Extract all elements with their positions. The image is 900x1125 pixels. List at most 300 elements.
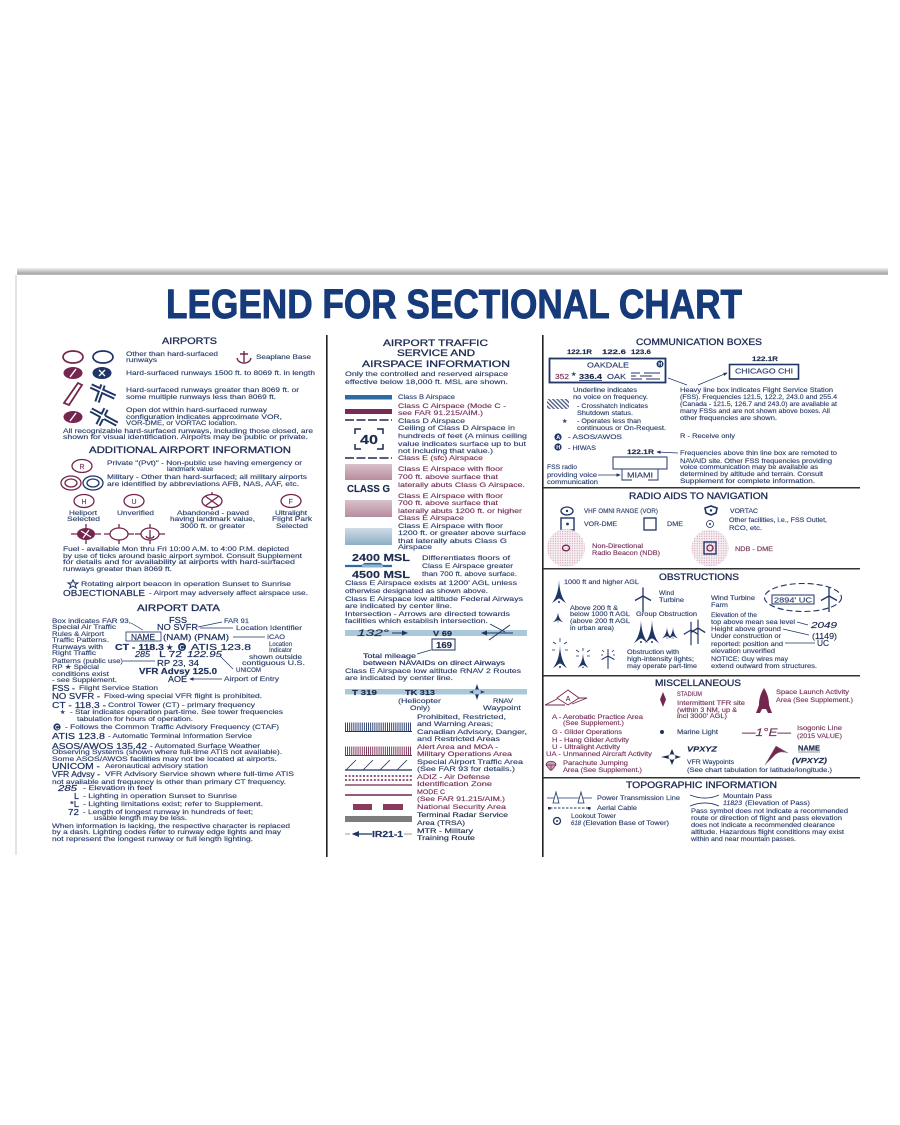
text: additional airport descriptions: by use of ticks around basic airport symbol. Consult Supplement xyxy=(63,553,302,560)
text: miscellaneous activity labels: G - Glider Operations xyxy=(552,729,623,736)
text: obstruction labels: Farm xyxy=(711,602,729,609)
text: airport data definitions: CT - 118.3 - xyxy=(52,701,107,710)
text: obstruction labels: Height above ground xyxy=(711,626,781,633)
text: mountain pass notes: Pass symbol does not indicate a recommended xyxy=(691,808,848,815)
icon: mountain pass xyxy=(690,795,719,806)
text: obstruction labels: in urban area) xyxy=(570,625,614,632)
text: airport data definitions: not represent the longest runway or full length lighting. xyxy=(52,836,253,843)
text: additional airport descriptions: Ultralight xyxy=(275,510,307,517)
icon: beacon star xyxy=(68,580,78,588)
text: additional airport descriptions: Private "(Pvt)" - Non-public use having emergency or xyxy=(107,460,303,467)
diagram: Chicago box xyxy=(668,356,798,385)
text: obstruction labels: elevation unverified xyxy=(711,648,775,655)
text: special use airspace descriptions: and Restricted Areas xyxy=(417,736,501,743)
key: communication symbols: Shutdown status. xyxy=(577,410,633,417)
text: airport data definitions: - Star indicates operation part-time. See tower frequencies xyxy=(70,709,284,716)
text: navigation aid labels: VOR-DME xyxy=(584,521,618,528)
text: additional airport descriptions: are identified by abbreviations AFB, NAS, AAF, etc. xyxy=(107,481,299,488)
text: airspace class descriptions: Class E Airspace with floor xyxy=(398,466,504,473)
heading: airspace information: AIRSPACE INFORMATION xyxy=(362,359,510,369)
airspace symbols: CLASS G xyxy=(347,484,390,495)
text: airports descriptions: VOR-DME, or VORTAC location. xyxy=(126,420,237,427)
diagram: airport data sample block: 285 xyxy=(134,650,151,659)
text: airspace class descriptions: otherwise designated as shown above. xyxy=(345,588,488,595)
text: additional airport descriptions: Flight Park xyxy=(272,516,313,523)
text: special use airspace descriptions: (See FAR 93 for details.) xyxy=(417,766,515,773)
text: special use airspace descriptions: and Warning Areas; xyxy=(417,721,493,728)
text: mountain pass notes: within and near mountain passes. xyxy=(690,836,796,843)
icon: wind turbine farm: 2894' UC xyxy=(774,596,813,604)
diagram: RNAV route T 319: Only) xyxy=(410,705,430,712)
text: navigation aid labels: Other facilities, i.e., FSS Outlet, xyxy=(729,517,827,524)
panel: airport data xyxy=(52,603,305,843)
text: airport data definitions: Fixed-wing special VFR flight is prohibited. xyxy=(104,693,262,700)
text: miscellaneous activity labels: (See Supplement.) xyxy=(563,720,624,727)
text: mountain pass notes: Mountain Pass xyxy=(723,793,773,800)
special use airspace symbols: IR21-1 xyxy=(372,830,404,839)
diagram: elevation labels: (1149) xyxy=(812,632,837,641)
diagram: Miami box: 122.1R xyxy=(627,449,654,456)
text: special use airspace descriptions: MTR - Military xyxy=(417,828,474,835)
text: airspace class descriptions: Class E Airspace low altitude Federal Airways xyxy=(345,596,524,603)
text: airport data definitions: - Automated Surface Weather xyxy=(150,743,261,750)
text: airport data definitions: L xyxy=(74,792,80,801)
text: airports descriptions: Open dot within hard-surfaced runway xyxy=(126,407,268,414)
key: communication symbols: - HIWAS xyxy=(568,445,597,452)
text: obstruction labels: below 1000 ft AGL xyxy=(570,611,630,618)
heading: airports: AIRPORTS xyxy=(162,336,217,346)
text: airspace class descriptions: Class D Airspace xyxy=(398,418,465,425)
text: special use airspace descriptions: Military Operations Area xyxy=(417,751,512,758)
text: airport data definitions: UNICOM - xyxy=(52,762,101,771)
icons: additional airport symbols xyxy=(61,460,301,544)
text: miscellaneous activity labels: incl 3000' AGL) xyxy=(677,713,727,720)
text: airspace class descriptions: Ceiling of Class D Airspace in xyxy=(398,425,515,432)
diagram: airport data sample block: L 72 xyxy=(159,650,182,659)
key: communication symbols: no voice on frequency. xyxy=(573,394,648,401)
text: miscellaneous activity labels: UA - Unmanned Aircraft Activity xyxy=(546,751,653,758)
text: miscellaneous activity labels: H - Hang Glider Activity xyxy=(552,737,630,744)
diagram: Miami box: FSS radio xyxy=(547,464,577,471)
heading: topographic information: TOPOGRAPHIC INFORMATION xyxy=(626,780,777,790)
diagram: airport data sample block: Runways with xyxy=(52,644,103,651)
text: airspace intro xyxy=(345,371,508,386)
icon: aerobatic practice area: A xyxy=(566,696,571,703)
special use airspace symbols xyxy=(345,727,412,839)
text: special use airspace descriptions: Identification Zone xyxy=(417,781,492,788)
diagram: airport data sample block: ATIS 123.8 xyxy=(191,643,251,652)
text: additional airport descriptions: for details and for availability at airports with hard-surfaced xyxy=(63,559,295,566)
text: airport data definitions: Control Tower (CT) - primary frequency xyxy=(108,702,256,709)
text: navigation aid labels xyxy=(584,508,827,557)
text: airspace class descriptions: not including that value.) xyxy=(398,448,493,455)
text: mountain pass notes xyxy=(690,793,848,843)
text: additional airport descriptions: Heliport xyxy=(69,510,97,517)
text: airports descriptions: All recognizable hard-surfaced runways, including those closed, are xyxy=(63,428,313,435)
heading: additional airport information: ADDITIONAL AIRPORT INFORMATION xyxy=(89,445,291,455)
text: airport data definitions: Flight Service Station xyxy=(79,685,158,692)
key: communication symbols: H xyxy=(556,445,560,451)
diagram: Chicago box: 122.1R xyxy=(752,356,778,363)
heading: airspace information: SERVICE AND xyxy=(397,348,475,358)
key: communication symbols: - Operates less than xyxy=(577,418,641,425)
diagram: federal airway V 69: Total mileage xyxy=(363,653,416,660)
text: heavy line box description: (Canada - 121.5, 126.7 and 243.0) are available at xyxy=(680,401,837,408)
text: heavy line box description: R - Receive only xyxy=(680,433,736,440)
text: airspace class descriptions: Class C Airspace (Mode C - xyxy=(398,403,506,410)
diagram: airport data sample block: Location Identifier xyxy=(236,625,303,632)
text: airspace class descriptions: Class E Airspace with floor xyxy=(398,523,504,530)
text: navigation aid labels: DME xyxy=(667,521,684,528)
diagram: Oakdale box: ★ xyxy=(571,371,576,378)
text: obstruction labels: NOTICE: Guy wires may xyxy=(711,656,789,663)
airspace symbols: 2400 MSL xyxy=(352,553,410,564)
text: obstruction labels: Above 200 ft & xyxy=(570,605,619,612)
text: airport data definitions: - Elevation in feet xyxy=(83,785,152,792)
text: airport data definitions: When information is lacking, the respective character is replaced xyxy=(52,823,290,830)
text: special use airspace descriptions: MODE C xyxy=(417,789,445,796)
text: miscellaneous activity labels: STADIUM xyxy=(677,691,702,698)
text: airspace class descriptions: laterally abuts 1200 ft. or higher xyxy=(398,508,523,515)
diagram: airport data sample block: RP 23, 34 xyxy=(157,659,200,668)
isogonic line: —1°E— xyxy=(741,727,792,739)
text: special use airspace descriptions: ADIZ - Air Defense xyxy=(417,774,490,781)
text: obstruction labels: 1000 ft and higher AGL xyxy=(564,579,639,586)
VFR waypoints: (VPXYZ) xyxy=(792,756,828,765)
text: airports descriptions: Hard-surfaced runways greater than 8069 ft. or xyxy=(126,387,300,394)
text: special use airspace descriptions: (See FAR 91.215/AIM.) xyxy=(417,796,505,803)
text: heavy line box description xyxy=(680,387,837,440)
text: airspace class descriptions: than 700 ft. above surface. xyxy=(422,571,517,578)
diagram: federal airway V 69: V 69 xyxy=(433,629,452,638)
key: communication symbols: - Crosshatch indicates xyxy=(577,403,649,410)
title: LEGEND FOR SECTIONAL CHART xyxy=(166,281,742,327)
diagram: elevation labels: 2049 xyxy=(810,621,838,630)
text: airport data definitions: - Length of longest runway in hundreds of feet; xyxy=(83,809,253,816)
text: beacon and objectionable notes: OBJECTIONABLE xyxy=(63,589,145,598)
text: topographic labels: 618 xyxy=(571,820,581,827)
icons: towers and turbines xyxy=(552,580,837,669)
diagram: airport data sample block: Patterns (public use) xyxy=(52,658,123,665)
text: miscellaneous activity labels: Parachute Jumping xyxy=(563,760,628,767)
text: topographic labels: Power Transmission Line xyxy=(597,795,680,802)
text: beacon and objectionable notes: Rotating airport beacon in operation Sunset to Sunrise xyxy=(81,581,291,588)
text: special use airspace descriptions: Alert Area and MOA - xyxy=(417,744,498,751)
text: airport data definitions: VFR Advsy - xyxy=(52,770,100,779)
diagram: RNAV route T 319: Waypoint xyxy=(483,705,521,712)
text: obstruction labels: high-intensity lights; xyxy=(627,656,694,663)
diagram: Oakdale box: H xyxy=(658,362,662,368)
diagram: Oakdale box: 122.6 xyxy=(602,349,626,356)
key: communication symbols: A xyxy=(556,435,560,441)
text: airport data definitions: - Lighting in operation Sunset to Sunrise xyxy=(83,793,237,800)
text: heavy line box description: Heavy line box indicates Flight Service Station xyxy=(680,387,833,394)
airspace symbols: 40 xyxy=(360,432,378,447)
text: airports descriptions xyxy=(63,351,315,441)
text: RNAV routes note: are indicated by center line. xyxy=(345,675,453,682)
diagram: RNAV route T 319: RNAV xyxy=(493,698,514,705)
text: airport data definitions: 72 xyxy=(68,808,79,817)
diagram: elevation labels: UC xyxy=(817,639,829,648)
text: airport data definitions: C xyxy=(55,725,60,731)
text: airports descriptions: runways xyxy=(126,357,158,364)
diagram: RNAV route T 319: (Helicopter xyxy=(398,698,442,705)
VFR waypoints xyxy=(661,746,832,774)
diagram: airport data sample block: UNICOM xyxy=(236,667,261,674)
text: airspace class descriptions: see FAR 91.215/AIM.) xyxy=(398,410,483,417)
text: airport data definitions: usable length may be less. xyxy=(94,815,187,822)
text: thin line box description: Frequencies above thin line box are remoted to xyxy=(680,450,837,457)
icon: parachute xyxy=(546,761,556,771)
key: communication symbols: continuous or On-Request. xyxy=(577,425,666,432)
text: miscellaneous activity labels: (within 3 NM, up & xyxy=(677,707,738,714)
diagram: airport data sample block: AOE xyxy=(168,675,187,684)
text: RNAV routes note xyxy=(345,668,522,682)
icon: marine light xyxy=(660,730,664,734)
panel: airports xyxy=(63,336,315,441)
panel: topographic information xyxy=(547,780,848,843)
diagram: Miami box xyxy=(547,449,678,486)
text: airport data definitions: ATIS 123.8 xyxy=(52,732,105,741)
text: airport data definitions: by a dash. Lighting codes refer to runway edge lights and may xyxy=(52,829,282,836)
diagram: airport data sample block: (NAM) (PNAM) xyxy=(163,633,230,642)
text: airspace class descriptions: 1200 ft. or greater above surface xyxy=(398,530,526,537)
diagram: elevation labels xyxy=(783,621,838,648)
text: airspace class descriptions: 700 ft. above surface that xyxy=(398,500,498,507)
text: navigation aid labels: Radio Beacon (NDB) xyxy=(592,550,660,557)
diagram: airport data sample block: contiguous U.S. xyxy=(242,660,305,667)
diagram: airport data sample block: Right Traffic xyxy=(52,650,97,657)
text: airport data definitions: NO SVFR - xyxy=(52,692,100,701)
heading: airspace information: AIRPORT TRAFFIC xyxy=(383,338,489,348)
text: additional airport descriptions: Selected xyxy=(67,516,100,523)
text: additional airport descriptions: 3000 ft. or greater xyxy=(180,523,246,530)
diagram: RNAV route T 319: TK 313 xyxy=(405,688,435,697)
text: special use airspace descriptions xyxy=(417,714,527,842)
text: topographic labels: Aerial Cable xyxy=(597,805,637,812)
text: airports descriptions: Seaplane Base xyxy=(256,354,311,361)
diagram: airport data sample block: VFR Advsy 125.0 xyxy=(139,667,218,676)
text: airspace class descriptions: value indicates surface up to but xyxy=(398,441,526,448)
diagram: Oakdale box: 123.6 xyxy=(631,349,651,356)
diagram: Oakdale box: OAK xyxy=(607,374,626,381)
diagram: Oakdale box xyxy=(550,349,666,382)
diagram: airport data sample block: NAME xyxy=(131,633,155,642)
icon: space launch rocket xyxy=(756,688,772,713)
text: thin line box description: determined by altitude and terrain. Consult xyxy=(680,471,823,478)
diagram: Oakdale box: OAKDALE xyxy=(587,362,629,370)
text: airports descriptions: some multiple runways less than 8069 ft. xyxy=(126,394,276,401)
text: airport data definitions: 285 xyxy=(57,784,78,793)
text: airport data definitions: tabulation for hours of operation. xyxy=(77,716,193,723)
text: airport data definitions: - Automatic Terminal Information Service xyxy=(108,733,252,740)
diagram: Miami box: communication xyxy=(547,479,598,486)
key: communication symbols: - ASOS/AWOS xyxy=(568,434,623,441)
text: topographic labels: (Elevation Base of Tower) xyxy=(583,820,669,827)
diagram: airport data sample block: Airport of Entry xyxy=(224,676,280,683)
text: miscellaneous activity labels: U - Ultralight Activity xyxy=(552,744,621,751)
text: special use airspace descriptions: Special Airport Traffic Area xyxy=(417,759,523,766)
text: additional airport descriptions xyxy=(63,460,313,573)
diagram: airport data sample block: Indicator xyxy=(269,647,293,654)
diagram: Miami box: providing voice xyxy=(547,472,597,479)
diagram: airport data sample block: Rules & Airport xyxy=(52,631,104,638)
text: obstruction labels: may operate part-time xyxy=(627,663,697,670)
text: thin line box description: voice communication may be available as xyxy=(680,464,819,471)
text: obstruction labels: Wind xyxy=(659,590,674,597)
text: airport data definitions: ★ xyxy=(60,709,65,716)
text: airspace class descriptions: 700 ft. above surface that xyxy=(398,474,498,481)
diagram: Miami box: MIAMI xyxy=(627,472,653,480)
airspace symbols xyxy=(345,395,410,581)
text: airport data definitions: - Lighting limitations exist; refer to Supplement. xyxy=(83,801,263,808)
text: airspace class descriptions: Class E Airspace greater xyxy=(422,563,514,570)
icons: airport symbols xyxy=(63,351,251,425)
diagram: federal airway V 69: 169 xyxy=(436,641,453,650)
text: additional airport descriptions: runways greater than 8069 ft. xyxy=(63,566,172,573)
diagram: airport data sample block: conditions exist xyxy=(52,671,109,678)
diagram: RNAV route T 319: T 319 xyxy=(352,688,377,697)
text: airspace class descriptions xyxy=(345,394,527,625)
heading: miscellaneous: MISCELLANEOUS xyxy=(655,678,741,688)
icon: aerobatic practice area xyxy=(545,690,587,705)
panel: additional airport information xyxy=(61,445,313,598)
text: thin line box description xyxy=(680,450,837,485)
key: communication symbols xyxy=(547,387,666,452)
icons: additional airport symbols: U xyxy=(132,499,137,506)
diagram: Oakdale box: 122.1R xyxy=(567,349,592,356)
text: miscellaneous activity labels: Intermittent TFR site xyxy=(677,700,745,707)
text: miscellaneous activity labels: Area (See Supplement.) xyxy=(776,697,853,704)
VFR waypoints: (See chart tabulation for latitude/longitude.) xyxy=(687,767,832,774)
text: airspace class descriptions: laterally abuts Class G Airspace. xyxy=(398,482,525,489)
text: airspace class descriptions: Class B Airspace xyxy=(398,394,455,401)
text: mountain pass notes: does not indicate a recommended clearance xyxy=(691,822,835,829)
text: obstruction labels: Obstruction with xyxy=(627,649,679,656)
panel: miscellaneous xyxy=(545,678,853,774)
text: obstruction labels: extend outward from structures. xyxy=(711,663,817,670)
icons: navigation aids xyxy=(547,506,728,567)
panel: radio aids to navigation xyxy=(547,491,827,567)
diagram: airport data sample block: NO SVFR xyxy=(157,623,198,632)
text: navigation aid labels: NDB - DME xyxy=(735,546,774,553)
text: miscellaneous activity labels: A - Aerobatic Practice Area xyxy=(552,714,643,721)
diagram: Oakdale box: 352 xyxy=(555,374,569,381)
airspace symbols: 4500 MSL xyxy=(352,570,410,581)
VFR waypoints: VFR Waypoints xyxy=(687,759,735,766)
isogonic line xyxy=(741,725,842,740)
panel: obstructions xyxy=(552,572,842,670)
text: mountain pass notes: altitude. Hazardous flight conditions may exist xyxy=(691,829,844,836)
text: heavy line box description: many FSSs and are not shown above boxes. All xyxy=(680,408,831,415)
text: additional airport descriptions: Unverified xyxy=(117,510,154,517)
text: airspace class descriptions: Differentiates floors of xyxy=(422,555,510,562)
text: airspace class descriptions: Class E Airspace xyxy=(398,515,464,522)
text: mountain pass notes: 11823 xyxy=(723,800,742,807)
isogonic line: (2015 VALUE) xyxy=(797,733,842,740)
diagram: airport data sample block: ICAO xyxy=(267,634,285,641)
text: airspace class descriptions: Airspace xyxy=(398,544,432,551)
text: airspace class descriptions: Intersection - Arrows are directed towards xyxy=(345,611,511,618)
text: airports descriptions: shown for visual identification. Airports may be public or private. xyxy=(63,434,308,441)
text: airspace class descriptions: Class E (sfc) Airspace xyxy=(398,455,483,462)
text: additional airport descriptions: Selected xyxy=(276,523,308,530)
diagram: airport data sample block: CT - 118.3 xyxy=(115,643,165,652)
icon: stadium diamond xyxy=(660,692,666,707)
text: obstruction labels: (above 200 ft AGL xyxy=(570,618,630,625)
diagram: airport data sample block: Location xyxy=(269,641,292,648)
heading: airspace information xyxy=(362,338,510,369)
text: beacon and objectionable notes xyxy=(63,581,308,598)
diagram: airport data sample block: 122.95 xyxy=(187,650,223,659)
text: topographic labels: Lookout Tower xyxy=(571,813,617,820)
text: airspace class descriptions: facilities which establish intersection. xyxy=(345,618,488,625)
text: airspace class descriptions: Class E Airspace with floor xyxy=(398,493,504,500)
text: additional airport descriptions: Military - Other than hard-surfaced; all military airports xyxy=(107,474,308,481)
icons: additional airport symbols: H xyxy=(82,499,87,506)
text: airports descriptions: Other than hard-surfaced xyxy=(126,351,218,358)
text: airport data definitions: not available and frequency is other than primary CT frequency. xyxy=(52,779,286,786)
diagram: airport data sample block xyxy=(52,616,305,684)
text: navigation aid labels: Non-Directional xyxy=(592,543,644,550)
text: beacon and objectionable notes: - Airport may adversely affect airspace use. xyxy=(149,590,308,597)
icons: additional airport symbols: R xyxy=(80,464,85,471)
text: obstruction labels: Under construction or xyxy=(711,633,782,640)
text: airport data definitions xyxy=(52,684,295,843)
text: airspace class descriptions: hundreds of feet (A minus ceiling xyxy=(398,433,527,440)
diagram: Oakdale box: 336.4 xyxy=(579,374,602,381)
diagram: airport data sample block: shown outside xyxy=(249,654,302,661)
icon: wind turbine farm xyxy=(764,584,842,612)
text: special use airspace descriptions: Terminal Radar Service xyxy=(417,812,508,819)
text: additional airport descriptions: landmark value xyxy=(167,466,213,473)
text: navigation aid labels: RCO, etc. xyxy=(729,525,762,532)
VFR waypoints: VPXYZ xyxy=(687,746,718,754)
text: airport data definitions: Aeronautical advisory station xyxy=(105,763,208,770)
text: airport data definitions: - Follows the Common Traffic Advisory Frequency (CTAF) xyxy=(65,724,279,731)
diagram: airport data sample block: FAR 91 xyxy=(224,618,249,625)
text: special use airspace descriptions: National Security Area xyxy=(417,804,506,811)
diagram: airport data sample block: Box indicates FAR 93, xyxy=(52,618,131,625)
diagram: airport data sample block: Traffic Patterns. xyxy=(52,637,109,644)
text: topographic labels xyxy=(571,795,680,827)
text: obstruction labels: Wind Turbine xyxy=(711,595,755,602)
diagram: Chicago box: CHICAGO CHI xyxy=(735,368,793,376)
text: miscellaneous activity labels xyxy=(546,689,853,774)
heading: communication boxes: COMMUNICATION BOXES xyxy=(636,337,762,347)
diagram: airport data sample block: ★ xyxy=(166,643,173,652)
text: airspace intro: Only the controlled and reserved airspace xyxy=(345,371,508,378)
text: airport data definitions: VFR Advisory Service shown where full-time ATIS xyxy=(105,771,295,778)
heading: airport data: AIRPORT DATA xyxy=(137,603,220,613)
text: special use airspace descriptions: Area (TRSA) xyxy=(417,820,465,827)
key: communication symbols: Underline indicates xyxy=(573,387,638,394)
text: airspace intro: effective below 18,000 ft. MSL are shown. xyxy=(345,379,508,386)
text: additional airport descriptions: having landmark value, xyxy=(170,516,255,523)
text: navigation aid labels: VORTAC xyxy=(730,508,758,515)
text: heavy line box description: other frequencies are shown. xyxy=(680,415,777,422)
text: obstruction labels xyxy=(564,579,817,670)
text: obstruction labels: Group Obstruction xyxy=(636,611,697,618)
diagram: RNAV route T 319 xyxy=(345,684,527,712)
text: RNAV routes note: Class E Airspace low altitude RNAV 2 Routes xyxy=(345,668,522,675)
diagram: federal airway V 69 xyxy=(345,624,527,667)
panel: airport traffic service and airspace information xyxy=(345,338,527,842)
text: airspace class descriptions: Class E Airspace exists at 1200' AGL unless xyxy=(345,580,518,587)
text: airspace class descriptions: are indicated by center line. xyxy=(345,603,452,610)
text: airport data definitions: *L xyxy=(70,800,80,809)
isogonic line: Isogonic Line xyxy=(797,725,842,732)
